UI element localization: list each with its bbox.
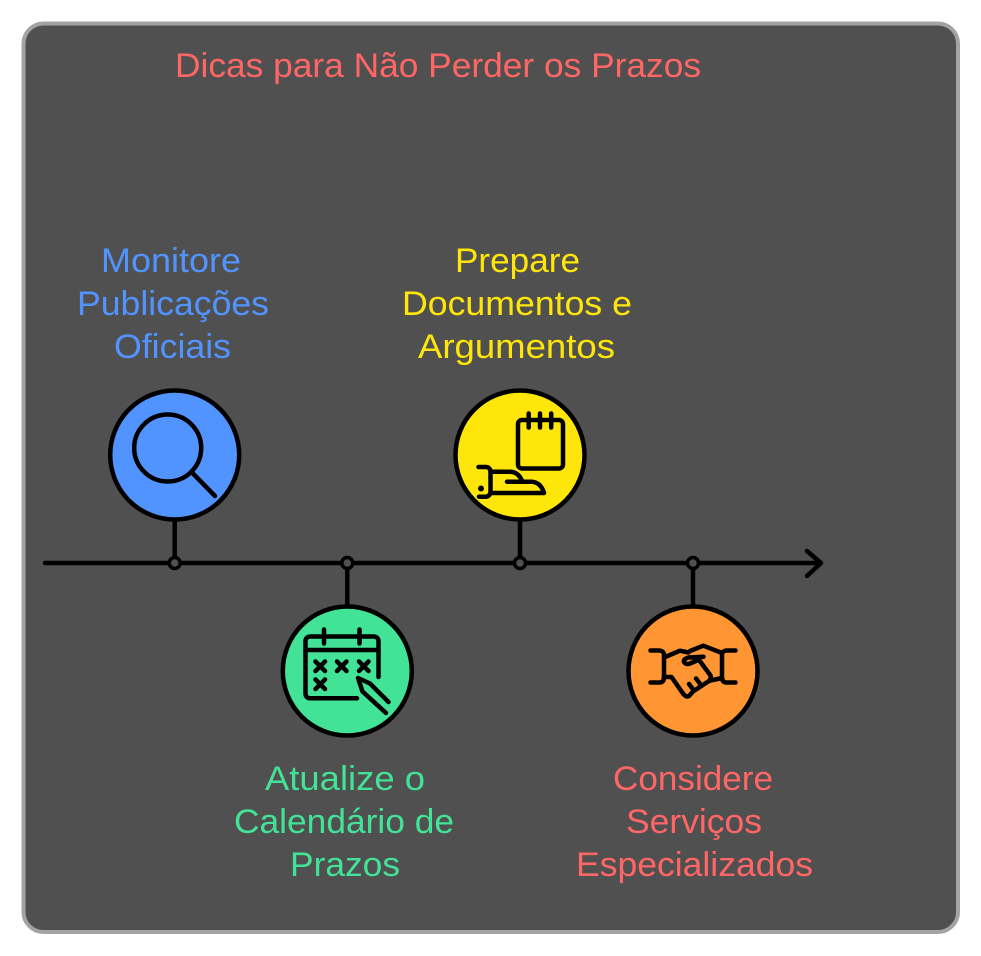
connector 1 bbox=[172, 520, 177, 563]
label: prepare: Prepare bbox=[455, 242, 580, 280]
label: monitore bbox=[77, 242, 269, 366]
label: considere: Considere bbox=[613, 760, 773, 798]
timeline arrow bbox=[45, 551, 821, 576]
label: considere: Serviços bbox=[626, 803, 762, 841]
title: Dicas para Não Perder os Prazos bbox=[175, 47, 701, 85]
connector 2 bbox=[345, 563, 350, 606]
label: monitore: Publicações bbox=[77, 285, 269, 323]
step 3: prepare documentos bbox=[402, 242, 632, 568]
icon: magnifying glass bbox=[134, 414, 215, 496]
circle 2 bbox=[283, 606, 412, 736]
step 2: atualize o calendário bbox=[234, 558, 454, 884]
node 1 bbox=[169, 558, 180, 568]
label: atualize: Prazos bbox=[290, 846, 400, 884]
node 2 bbox=[342, 558, 353, 568]
label: atualize: Atualize o bbox=[265, 760, 425, 798]
step 4: considere serviços bbox=[576, 558, 813, 884]
connector 4 bbox=[691, 563, 695, 606]
label: prepare: Documentos e bbox=[402, 285, 632, 323]
label: monitore: Monitore bbox=[101, 242, 241, 280]
step 1: monitore publicações oficiais bbox=[77, 242, 269, 568]
label: atualize: Calendário de bbox=[234, 803, 454, 841]
label: considere bbox=[576, 760, 813, 884]
node 4 bbox=[688, 558, 698, 568]
circle 4 bbox=[628, 606, 758, 736]
icon: hand with notepad bbox=[478, 414, 563, 497]
label: monitore: Oficiais bbox=[114, 328, 231, 366]
node 3 bbox=[514, 558, 526, 568]
circle 3 bbox=[456, 390, 584, 520]
label: considere: Especializados bbox=[576, 846, 813, 884]
icon: handshake bbox=[650, 646, 736, 696]
label: atualize bbox=[234, 760, 454, 884]
label: prepare bbox=[402, 242, 632, 366]
label: prepare: Argumentos bbox=[418, 328, 615, 366]
circle 1 bbox=[110, 390, 239, 520]
connector 3 bbox=[518, 520, 522, 563]
icon: calendar and pen bbox=[306, 630, 388, 713]
